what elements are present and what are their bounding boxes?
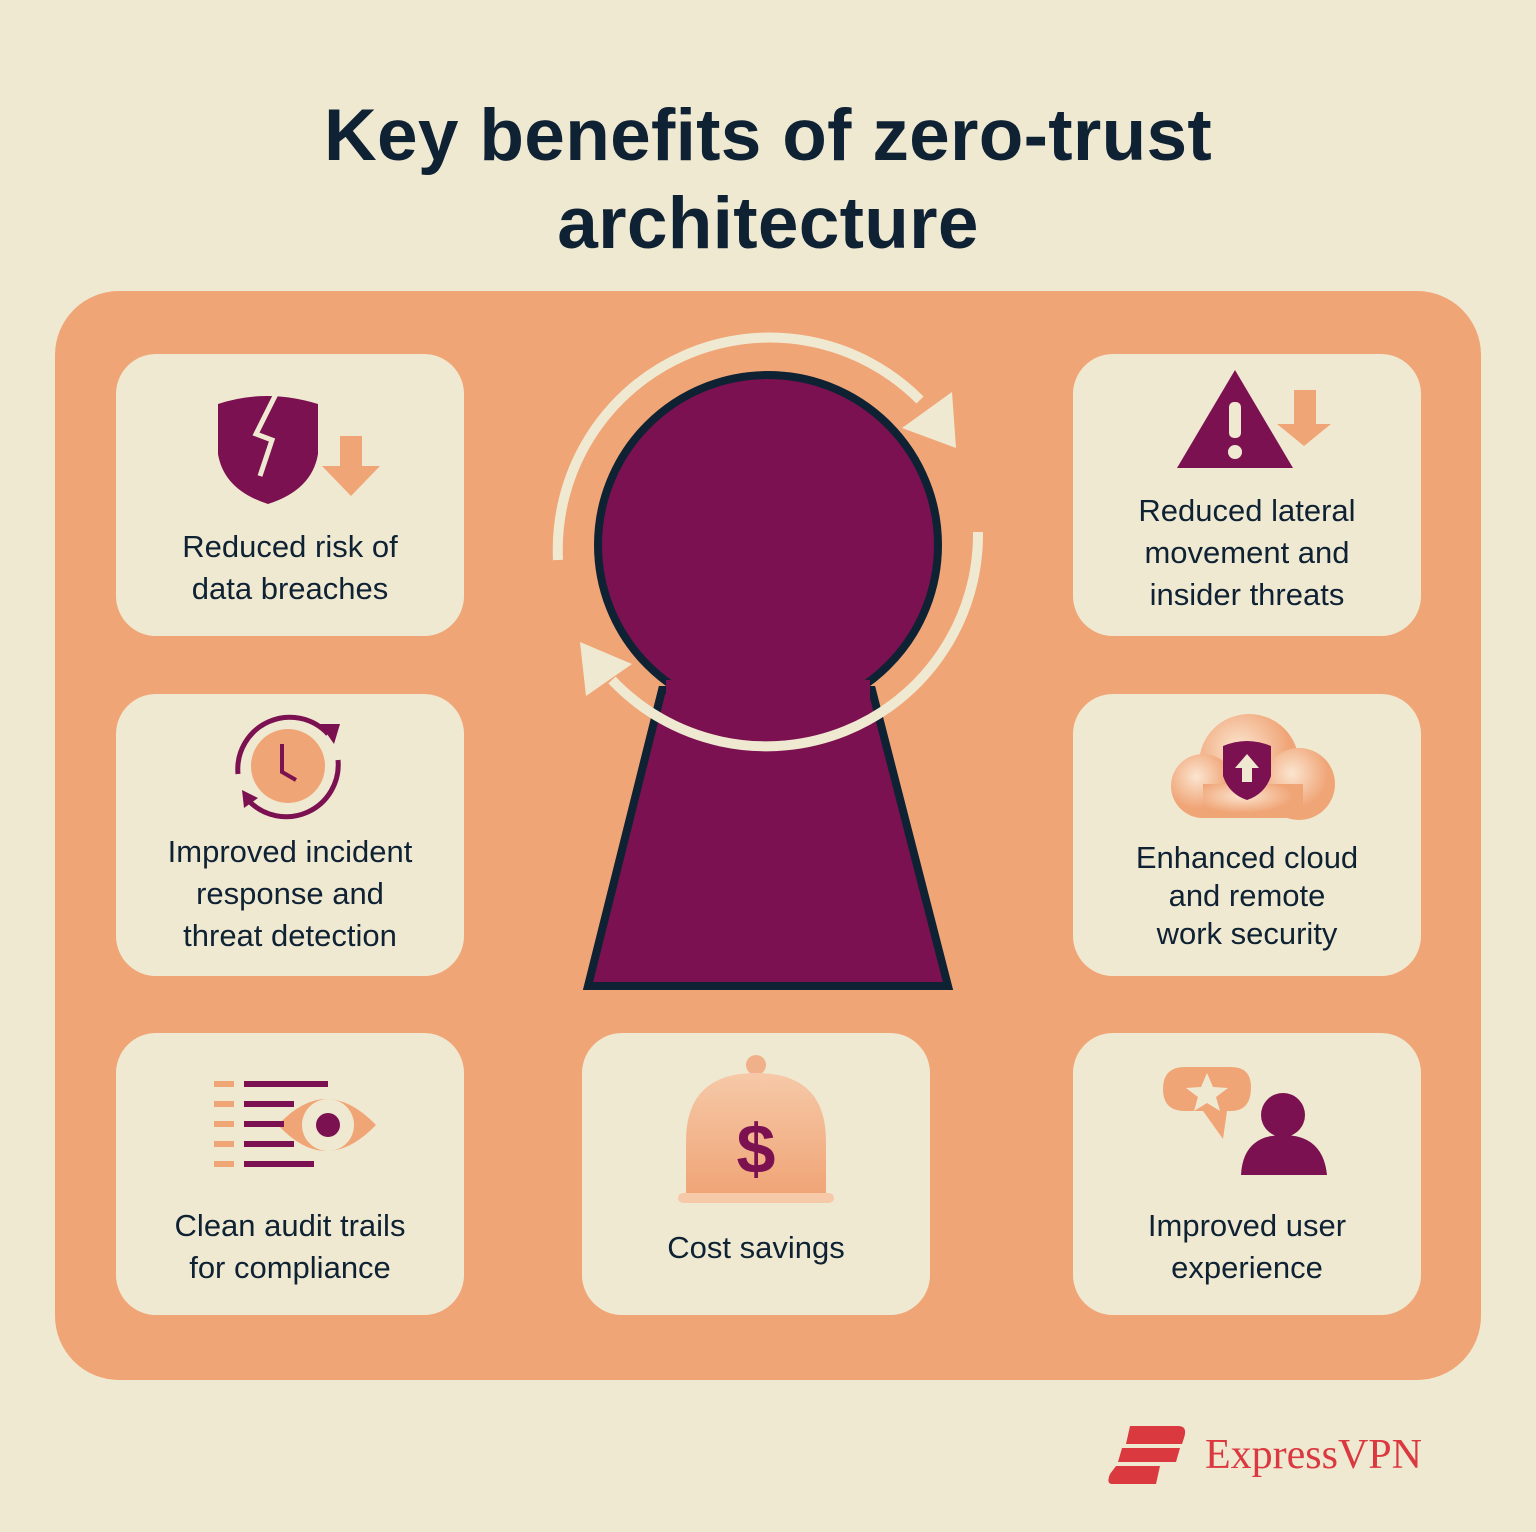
card: user experience bbox=[1073, 1033, 1421, 1315]
card: cloud security: and remote bbox=[1169, 878, 1325, 913]
card: cost savings bbox=[582, 1033, 930, 1315]
title bbox=[324, 95, 1212, 264]
card: incident response: Improved incident bbox=[168, 834, 412, 869]
card: data breaches: data breaches bbox=[192, 571, 388, 606]
panel: benefits bbox=[55, 291, 1481, 1380]
card: incident response: response and bbox=[196, 876, 384, 911]
card: incident response: threat detection bbox=[183, 918, 397, 953]
card: cloud security: Enhanced cloud bbox=[1136, 840, 1358, 875]
card: cost savings: Cost savings bbox=[667, 1230, 845, 1265]
card: incident response bbox=[116, 694, 464, 976]
card: lateral movement: movement and bbox=[1144, 535, 1350, 570]
card: user experience: Improved user bbox=[1148, 1208, 1346, 1243]
card: lateral movement: Reduced lateral bbox=[1138, 493, 1356, 528]
card: data breaches bbox=[116, 354, 464, 636]
card: lateral movement bbox=[1073, 354, 1421, 636]
card: user experience: experience bbox=[1171, 1250, 1323, 1285]
title: architecture bbox=[557, 183, 979, 264]
card: audit trails: for compliance bbox=[189, 1250, 391, 1285]
card: cloud security: work security bbox=[1157, 916, 1337, 951]
logo: ExpressVPN: ExpressVPN bbox=[1205, 1432, 1422, 1478]
card: audit trails bbox=[116, 1033, 464, 1315]
card: cloud security bbox=[1073, 694, 1421, 976]
card: data breaches: Reduced risk of bbox=[182, 529, 398, 564]
card: audit trails: Clean audit trails bbox=[175, 1208, 405, 1243]
card: lateral movement: insider threats bbox=[1150, 577, 1344, 612]
card: cost savings: $ bbox=[737, 1110, 775, 1188]
icon: rotation arrows bbox=[558, 338, 978, 746]
logo: ExpressVPN bbox=[1108, 1426, 1422, 1484]
title: Key benefits of zero-trust bbox=[324, 95, 1212, 176]
